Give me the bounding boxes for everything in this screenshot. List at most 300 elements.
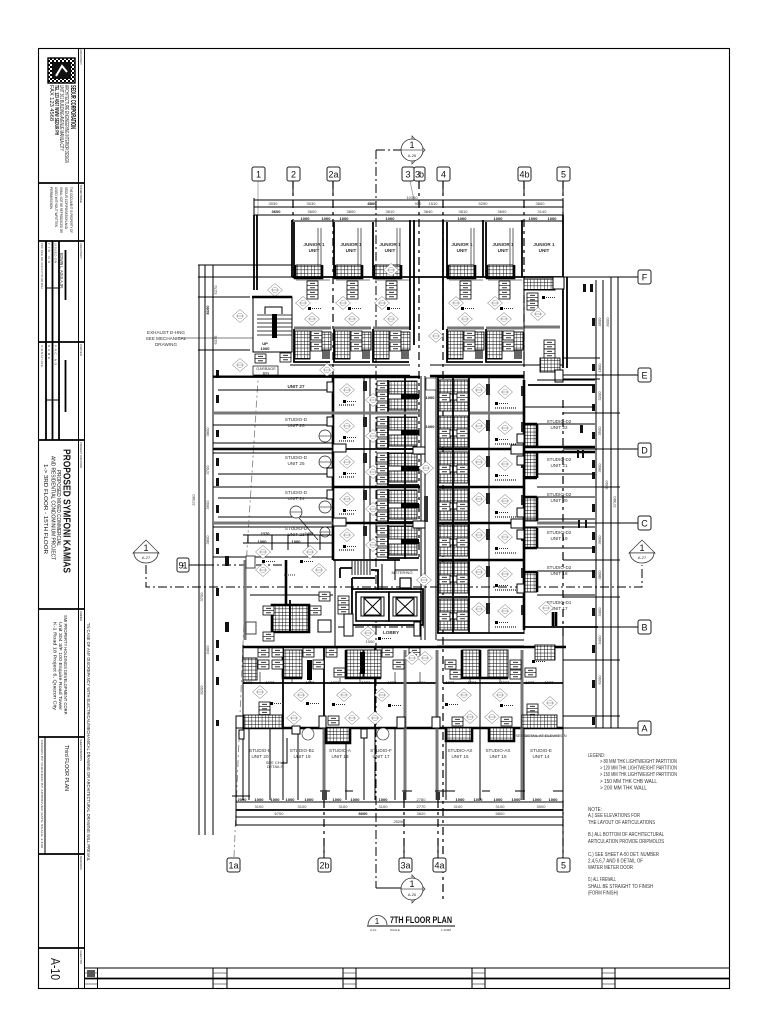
lower door dims: 1000 [333, 797, 342, 802]
lobby: 1000 [366, 639, 375, 644]
studio labels lower: STUDIO-E [530, 748, 552, 753]
project notes: SHALL NOT BE REPRODUCED OR [59, 187, 63, 233]
unit labels upper: UNIT [385, 248, 396, 253]
right dimension strings: 3600 [597, 535, 602, 544]
logo centre mark [52, 62, 71, 79]
door circles [290, 382, 333, 540]
studio labels lower: UNIT 19 [293, 754, 311, 759]
lower left suite: 2370 [261, 531, 270, 536]
lower door dims: 1000 [512, 797, 521, 802]
vertical discrepancy note: "IN CASE OF ANY DISCREPANCY WITH ELECTRICAL/MECHANICAL DRAWING OR ARCHITECTURAL DRAWING WILL PREVAIL [86, 623, 91, 862]
architect block: ISSUED ON [54, 243, 58, 263]
balcony door dims: 1000 [548, 216, 557, 221]
studio label: unit 25: UNIT 25 [287, 461, 305, 466]
project notes [49, 187, 73, 233]
column bubbles top: 4 [441, 170, 446, 180]
upper wing units [232, 215, 567, 382]
notes: B.) ALL BOTTOM OF ARCHITECTURAL [588, 832, 664, 838]
lobby [338, 596, 424, 644]
block labels: SHEET CONTENTS [79, 739, 83, 761]
bottom dimension strings: 8000 [359, 811, 368, 816]
column bubbles bottom [227, 858, 570, 872]
bottom dimension strings [236, 796, 563, 840]
unit: junior 1BR D [447, 221, 484, 362]
stair core upper left: 1000 [261, 346, 270, 351]
callout lower [266, 733, 567, 769]
block labels: ARCHITECT [79, 49, 83, 65]
unit labels upper: UNIT [309, 248, 320, 253]
top dimension strings: 3030 [307, 201, 316, 206]
unit labels upper: JUNIOR 1 [379, 242, 401, 247]
firm logo [48, 58, 75, 83]
marker: right section: A-27 [638, 555, 647, 560]
lower left suite: 1000 [258, 539, 267, 544]
legend [588, 753, 677, 792]
section line horizontal [146, 565, 642, 587]
exhaust note [146, 330, 253, 347]
column bubbles top: 1 [256, 170, 261, 180]
row bubbles: D [641, 446, 648, 456]
door dims lower: 1000 [501, 680, 510, 685]
tags east [517, 425, 587, 626]
unit labels upper: JUNIOR 1 [340, 242, 362, 247]
owner address [52, 615, 68, 715]
tags upper wing [232, 264, 444, 376]
door dims lower: 1000 [244, 680, 253, 685]
balcony door dims: 1000 [301, 216, 310, 221]
corridor [413, 376, 436, 640]
drawing title: 1 [375, 917, 380, 926]
left dimension strings: 37380 [191, 494, 196, 506]
top dimension strings: 3800 [536, 201, 545, 206]
stair: METERING [391, 570, 413, 575]
corridor: 2770 [414, 628, 421, 632]
right dimension strings: 3400 [597, 635, 602, 644]
lift shaft left [356, 592, 389, 621]
top dimension strings [254, 195, 563, 222]
top dimension strings: 1510 [429, 201, 438, 206]
studio labels lower: STUDIO-AS [485, 748, 511, 753]
left dimension strings: 8200 [199, 685, 204, 694]
block labels [79, 49, 83, 965]
row bubbles: F [642, 272, 648, 282]
row bubbles: B [641, 622, 648, 632]
unit: junior 1BR C [373, 221, 410, 362]
top dimension strings: 3840 [424, 209, 433, 214]
studio label: unit 18: UNIT 18 [550, 571, 568, 576]
lower door dims: 1000 [255, 797, 264, 802]
unit labels upper: UNIT [457, 248, 468, 253]
room tags row [252, 652, 558, 726]
row bubbles [177, 270, 651, 735]
stair core upper left: UP [262, 341, 268, 346]
right dimension strings: 3800 [597, 570, 602, 579]
lower left suite: 2400 [305, 531, 314, 536]
studio label: unit 26 [285, 417, 308, 428]
lower left suite: 1000 [292, 539, 301, 544]
door dims lower: 2770 [417, 680, 426, 685]
project title [42, 449, 72, 573]
notes: SHALL BE STRAIGHT TO FINISH [588, 884, 653, 890]
door dims lower: 1000 [362, 680, 371, 685]
lower door dims: 1000 [533, 797, 542, 802]
block labels: PROJECT NAME [79, 185, 83, 203]
legend: > 200 MM THK WALL [600, 786, 647, 792]
block labels: PROJECT LOCATION [79, 442, 83, 468]
architect block: PRC NO [54, 345, 58, 366]
studio label: unit 27: UNIT 27 [287, 384, 305, 389]
firm name: FAX 123 4568 [48, 85, 54, 121]
architect block: TIN NO [47, 243, 51, 264]
bottom dimension strings: 2770 [417, 804, 426, 809]
right dimension strings: 8000 [605, 317, 610, 326]
bottom dimension strings: 3100 [298, 804, 307, 809]
block labels: OWNER [79, 611, 83, 622]
unit labels upper: UNIT [346, 248, 357, 253]
firm name: UNIT 301 BUILDING AVENUE MANILA CITY [58, 85, 64, 151]
section line bottom [376, 887, 401, 889]
bottom dimension strings: 3000 [537, 804, 546, 809]
marker: left section [133, 540, 159, 563]
architect block: NAME [47, 345, 51, 359]
column bubbles top: 4b [520, 170, 530, 180]
right dimension strings: 1800 [597, 363, 602, 372]
studio label: unit 24 [285, 490, 308, 501]
studio label: unit 21 [547, 457, 572, 468]
door dims lower: 1000 [545, 680, 554, 685]
door dims lower: 1000 [468, 680, 477, 685]
unit labels upper: JUNIOR 1 [533, 242, 555, 247]
left dimension strings [191, 265, 292, 835]
studio label: unit 17: STUDIO-D1 [547, 600, 572, 605]
unit labels upper: JUNIOR 1 [492, 242, 514, 247]
lower door dims: 1000 [379, 797, 388, 802]
bath row [243, 645, 555, 683]
studio labels lower: UNIT 17 [372, 754, 390, 759]
studio labels lower: UNIT 16 [451, 754, 469, 759]
studio label: unit 24: UNIT 24 [287, 496, 305, 501]
top dimension strings: 3140 [538, 209, 547, 214]
legend: > 120 MM THK LIGHTWEIGHT PARTITION [600, 766, 677, 772]
studio labels lower: UNIT 15 [489, 754, 507, 759]
callout lower: SEE CH-3 [266, 760, 285, 765]
lower door dims: 1000 [474, 797, 483, 802]
window frame [225, 556, 229, 566]
left dimension strings: 3800 [205, 427, 210, 436]
studio label: unit 26: UNIT 26 [287, 423, 305, 428]
studio label: unit 17: UNIT 17 [550, 606, 568, 611]
balcony door dims: 1000 [322, 216, 331, 221]
stair core upper left [252, 297, 292, 376]
right dimension strings: 3400 [597, 607, 602, 616]
studio label: unit 17 [547, 600, 572, 611]
stair core upper left: GARBAGE [256, 366, 276, 371]
top dimension strings: 3600 [308, 209, 317, 214]
bottom dimension strings: 3100 [496, 804, 505, 809]
grid lines [189, 181, 638, 900]
unit: end unit [524, 277, 564, 382]
right dimension strings: 3200 [597, 391, 602, 400]
right dimension strings: 4500 [597, 317, 602, 326]
top dimension strings: 3810 [386, 209, 395, 214]
left dimension strings: 3700 [205, 465, 210, 474]
studio label: unit 19 [547, 530, 572, 541]
notes: A.) SEE ELEVATIONS FOR [588, 813, 640, 819]
drawing info row: DRAWN BY CHECKED BY APPROVED DATE SCALE 1:100 [40, 740, 44, 848]
notes: ARTICULATION PROVIDE DRIPMOLDS [588, 839, 665, 845]
lower door dims: 2780 [417, 797, 426, 802]
project title: PROPOSED SYMFONI KAMIAS [60, 449, 72, 573]
lower door dims: 1000 [305, 797, 314, 802]
row bubbles: E [641, 370, 648, 380]
marker: top section: 1 [409, 140, 415, 150]
unit labels upper: JUNIOR 1 [303, 242, 325, 247]
door dims lower [244, 680, 554, 685]
studio label: unit 18: STUDIO-D2 [547, 565, 572, 570]
callout lower: SEE DETAIL AT ELEVATION [515, 733, 567, 738]
top dimension strings: 3030 [269, 201, 278, 206]
block labels: SHEET NO [79, 950, 83, 965]
legend: LEGEND: [588, 753, 605, 759]
bottom dimension strings: 3820 [417, 811, 426, 816]
door dims lower: 1000 [526, 680, 535, 685]
architect block: EDWIN L. AGULA JR. [58, 253, 64, 289]
drawing title [367, 915, 455, 932]
top dimension strings: 5290 [479, 201, 488, 206]
balcony door dims [301, 216, 557, 221]
callout lower: DETAILS [267, 764, 284, 769]
studio label: unit 24: STUDIO-D [285, 490, 308, 495]
exhaust note: DRAWING [155, 342, 177, 347]
tile lower [239, 715, 557, 743]
notes: (FORM FINISH) [588, 890, 618, 896]
lower door dims [238, 797, 558, 802]
sheet contents: Third FLOOR PLAN [63, 745, 69, 791]
marker: right section [629, 540, 655, 563]
notes: WATER METER DOOR [588, 865, 633, 871]
top dimension strings: 3690 [498, 209, 507, 214]
architect block: SIGNATURE [40, 345, 44, 367]
right dimension strings [563, 277, 620, 728]
legend: > 150 MM THK LIGHTWEIGHT PARTITION [600, 772, 677, 778]
wing outer structure [254, 215, 567, 368]
wall blocks [236, 716, 440, 728]
row bubbles: C [641, 518, 648, 528]
tile blocks east [525, 424, 537, 592]
studio label: unit 19: STUDIO-D2 [547, 530, 572, 535]
lower door dims: 1000 [271, 797, 280, 802]
balcony door dims: 1000 [458, 216, 467, 221]
studio label: unit 21: UNIT 21 [550, 463, 568, 468]
studio labels lower: UNIT 14 [532, 754, 550, 759]
studio label: unit 25 [285, 455, 308, 466]
architect block [40, 241, 66, 440]
lower wing [232, 635, 567, 810]
block labels: OWNER [79, 344, 83, 357]
owner address: SMI PROPERTY HOLDINGS DEVELOPMENT CORP. [63, 615, 68, 715]
top dimension strings: 3600 [272, 209, 281, 214]
column bubbles top: 2a [328, 170, 338, 180]
studio labels lower [249, 748, 552, 759]
studio label: unit 23 [285, 526, 308, 537]
exhaust note: SEE MECHANICAL [146, 336, 187, 341]
left dimension strings: 8100 [205, 305, 210, 314]
marker: left section: A-27 [142, 555, 151, 560]
east studios [517, 380, 598, 630]
door dims lower: 1000 [388, 680, 397, 685]
studio labels lower: STUDIO-AS [447, 748, 473, 753]
marker: top section: A-26 [408, 153, 417, 158]
unit labels upper: UNIT [539, 248, 550, 253]
column bubbles bottom: 4a [434, 860, 444, 870]
drawing title: SCALE [390, 928, 400, 932]
studio label: unit 20 [547, 492, 572, 503]
unit labels upper [303, 242, 555, 253]
unit: junior 1BR B [334, 221, 371, 362]
section markers [133, 136, 655, 903]
top dimension strings: 3810 [459, 209, 468, 214]
studio label: unit 26: STUDIO-D [285, 417, 308, 422]
project title: AND RESIDENTIAL CONDOMINIUM PROJECT [50, 456, 56, 560]
door dims lower: 1000 [306, 680, 315, 685]
marker: bottom section [401, 875, 425, 903]
right dimension strings: 6200 [597, 675, 602, 684]
studio labels lower: STUDIO-A [329, 748, 352, 753]
notes: 2,4,5,6,7 AND 8 DETAIL OF [588, 858, 643, 864]
left dimension strings: 3600 [205, 500, 210, 509]
notes: THE LAYOUT OF ARTICULATIONS [588, 820, 656, 826]
notes: C.) SEE SHEET A-50 DET. NUMBER [588, 852, 659, 858]
drawing title: 7TH FLOOR PLAN [390, 915, 452, 925]
studio labels lower: STUDIO-F [370, 748, 392, 753]
column bubbles bottom: 3a [400, 860, 410, 870]
unit labels upper: UNIT [498, 248, 509, 253]
studio label: unit 23: STUDIO-D [285, 526, 308, 531]
column bubbles bottom: 1a [228, 860, 238, 870]
bottom dimension strings: 6700 [275, 811, 284, 816]
lower door dims: 1000 [351, 797, 360, 802]
firm name: SEDUR CORPORATION [69, 85, 76, 129]
lower door dims: 1000 [456, 797, 465, 802]
lower door dims: 1000 [549, 797, 558, 802]
right dimension strings: 3600 [597, 463, 602, 472]
project title: 1-> 3RD FLOOR - 15TH FLOOR [42, 464, 48, 554]
project title: PROPOSED MIXED COMMERCIAL [55, 470, 61, 546]
architect block: PRC REG NO. 00123 PTR NO 9912 [40, 243, 44, 289]
column bubbles top: 5 [561, 170, 566, 180]
lift core [338, 560, 432, 644]
sheet number: A-10 [48, 958, 63, 980]
studio label: unit 22 [547, 419, 572, 430]
section line top [376, 150, 401, 888]
studio labels lower: STUDIO-B [249, 748, 271, 753]
left dimension strings: 3400 [205, 645, 210, 654]
lower door dims: 1000 [494, 797, 503, 802]
unit: junior 1BR A [294, 221, 331, 362]
studio label: unit 21: STUDIO-D2 [547, 457, 572, 462]
firm name: TEL 123 4567 WWW SEDUR PH [53, 85, 59, 135]
column bubbles top [252, 167, 570, 181]
revision table [85, 968, 730, 989]
corridor: 1000 [426, 395, 435, 400]
balcony door dims: 1000 [340, 216, 349, 221]
balcony door dims: 1000 [494, 216, 503, 221]
studio labels lower: STUDIO-B1 [290, 748, 315, 753]
notes: NOTE: [588, 807, 602, 813]
notes [588, 807, 665, 896]
studio label: unit 20: STUDIO-D2 [547, 492, 572, 497]
marker: left section: 1 [143, 543, 149, 553]
corridor: 1000 [426, 424, 435, 429]
marker: bottom section: A-26 [408, 892, 417, 897]
firm name [48, 85, 76, 163]
studio label: unit 22: UNIT 22 [550, 425, 568, 430]
drawing title: A-10 [370, 928, 377, 932]
bottom dimension strings: 3100 [454, 804, 463, 809]
top dimension strings: 3800 [347, 209, 356, 214]
column bubbles top: 2 [291, 170, 296, 180]
studio labels lower: UNIT 20 [251, 754, 269, 759]
legend: > 150 MM THK CHB WALL [600, 779, 657, 785]
project notes: SEDUR CORPORATION AND [64, 187, 68, 229]
studio label: unit 25: STUDIO-D [285, 455, 308, 460]
top dimension strings: 8800 [368, 201, 377, 206]
bottom dimension strings: 3100 [339, 804, 348, 809]
marker: bottom section: 1 [409, 879, 415, 889]
balcony door dims: 1000 [529, 216, 538, 221]
lobby: LOBBY [383, 630, 399, 635]
project notes: THE DOCUMENT IS PROPERTY OF [69, 187, 73, 233]
block labels: REMARKS [79, 856, 83, 870]
door dims lower: 1000 [331, 680, 340, 685]
bottom dimension strings: 25250 [393, 819, 405, 824]
central rooms left [333, 377, 420, 560]
block labels: ARCHITECT [79, 243, 83, 259]
owner address: Unit 304 3/F 100 Esquire Road Tower [58, 622, 63, 711]
bottom dimension strings: 5800 [496, 811, 505, 816]
lift shaft right [389, 592, 421, 621]
top dimension strings: 10350 [406, 195, 418, 200]
lower left suite [225, 531, 335, 650]
marker: right section: 1 [639, 543, 645, 553]
unit: junior 1BR E [486, 221, 523, 362]
studio label: unit 18 [547, 565, 572, 576]
column bubbles bottom: 5 [561, 860, 566, 870]
studio label: unit 22: STUDIO-D2 [547, 419, 572, 424]
column bubbles bottom: 2b [320, 860, 330, 870]
left dimension strings: 5270 [213, 285, 218, 294]
marker: top section [401, 136, 425, 164]
unit labels upper: JUNIOR 1 [451, 242, 473, 247]
project notes: USED WITHOUT WRITTEN [54, 187, 58, 227]
right dimension strings: 5800 [604, 480, 609, 489]
left dimension strings: 3800 [205, 535, 210, 544]
studio label: unit 20: UNIT 20 [550, 498, 568, 503]
right dimension strings: 37380 [612, 496, 617, 508]
row bubbles: 9-1 [178, 560, 188, 570]
firm name: ARCHITECTURE ENGINEERING INTERIOR DESIGN [63, 85, 69, 163]
left dimension strings: 6375 [213, 335, 218, 344]
owner address: K-1 Road 18 Project 6, Quezon City [52, 622, 58, 711]
west studios [213, 376, 333, 560]
dimension ticks left [216, 370, 219, 726]
studio label: unit 23: UNIT 23 [287, 532, 305, 537]
title block [38, 48, 85, 989]
drawing title: 1:100M [441, 928, 452, 932]
balcony door dims: 1000 [386, 216, 395, 221]
column bubbles top: 3b [415, 170, 424, 180]
central rooms right [437, 376, 524, 634]
